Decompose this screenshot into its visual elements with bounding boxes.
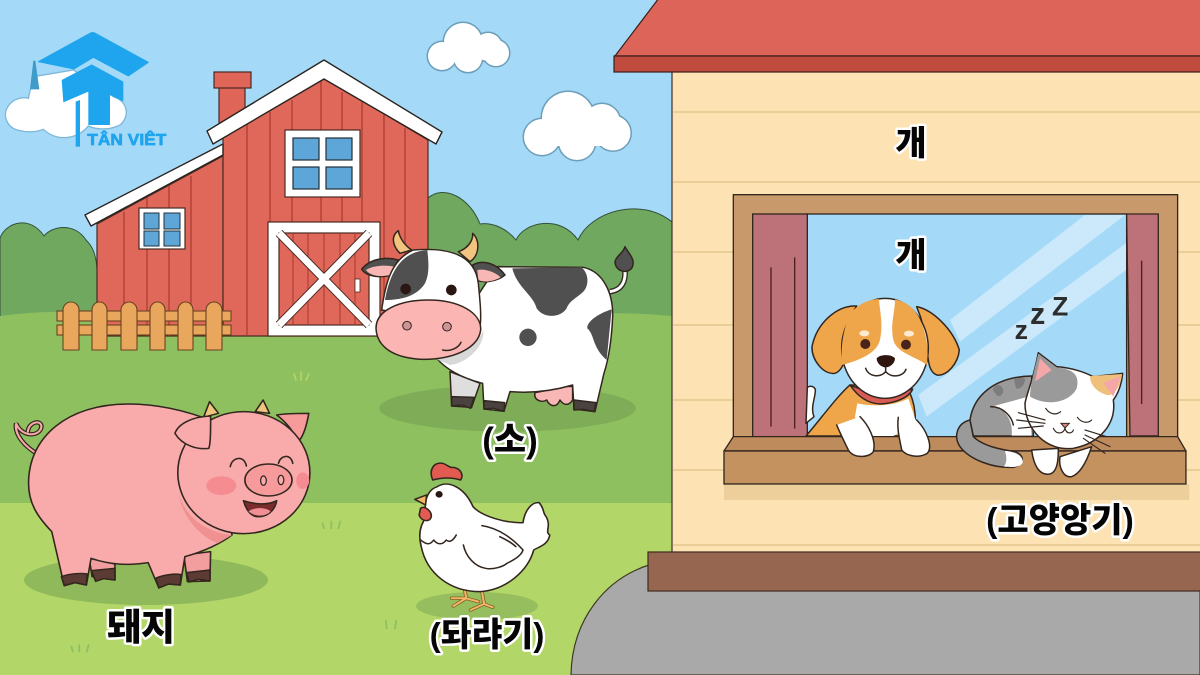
cat stripes: [993, 378, 1025, 396]
pig horns: [203, 400, 270, 417]
dog chest: [855, 398, 917, 436]
barn: plank lines: [124, 80, 405, 336]
dog face: [859, 330, 914, 376]
chimney: [214, 72, 251, 126]
cow shadow: [379, 385, 636, 432]
cat: [957, 353, 1123, 477]
chicken wattle: [419, 507, 431, 521]
dog body: [806, 385, 915, 436]
house roof: [615, 0, 1200, 56]
label: 고양앙기: (고양앙기): [986, 502, 1134, 540]
barn: left shed wall: [97, 156, 223, 336]
logo tassel: [30, 61, 39, 89]
pig head shade: [179, 493, 232, 543]
dog paws: [837, 417, 930, 456]
pig: [16, 400, 310, 588]
window: [724, 195, 1189, 500]
house siding lines: [673, 112, 1200, 545]
chicken: [415, 463, 550, 610]
barn: shed roof: [85, 144, 223, 226]
pig front hooves: [61, 573, 181, 588]
roof fascia: [614, 56, 1200, 72]
barn: main wall: [223, 78, 428, 336]
house: [614, 0, 1200, 591]
cow udder: [535, 386, 573, 406]
cow tail: [610, 247, 633, 292]
pig eyes: [230, 456, 293, 467]
pig head: [178, 412, 310, 534]
pig back legs: [89, 552, 211, 582]
logo cloud: [5, 70, 126, 138]
cow head patch: [385, 250, 428, 300]
sky background: [0, 0, 680, 340]
logo wordmark: TÂN VIÊT: [87, 130, 167, 149]
cow ears: [362, 258, 505, 282]
meadow: darker back field: [0, 312, 672, 510]
barn: door: [268, 222, 380, 336]
sleeping z letters: z: [1015, 315, 1028, 345]
label: 돼지: 돼지: [107, 607, 175, 648]
cat head: [1025, 353, 1123, 449]
pig cheeks: [206, 472, 309, 495]
chicken shadow: [416, 592, 538, 620]
logo letter T: [62, 64, 123, 147]
sleeping z letters: [1015, 292, 1068, 345]
pig body: [29, 404, 232, 588]
pavement: [571, 564, 1200, 675]
right curtain: [1127, 214, 1158, 436]
cat paws: [1032, 447, 1092, 477]
dog head patches: [842, 299, 928, 365]
cow hooves: [484, 400, 596, 412]
label: 개 in window: 개: [895, 237, 927, 275]
logo: Tân Việt: [5, 32, 167, 149]
pig tail: [16, 422, 41, 454]
meadow: lighter front field: [0, 503, 672, 675]
cat leg line: [991, 407, 1013, 425]
cow shadow under muzzle: [437, 330, 483, 365]
dog collar: [850, 385, 913, 404]
house wall: [672, 60, 1200, 555]
pig shadow: [24, 555, 268, 605]
barn: main roof: [207, 60, 442, 144]
pig snout: [245, 464, 292, 496]
cat ears inner: [1035, 358, 1121, 397]
cow face details: [400, 284, 461, 350]
window sill shadow: [724, 484, 1189, 500]
cloud: top centre: [428, 23, 509, 72]
fence: [57, 302, 231, 350]
left curtain: [753, 214, 807, 437]
chicken eye: [436, 491, 443, 498]
dog tail: [806, 386, 815, 423]
window glass: [807, 214, 1127, 437]
chicken feathers and wing: [421, 526, 523, 569]
barn: [85, 60, 442, 336]
chicken beak: [415, 495, 427, 505]
bushes behind barn: [0, 192, 672, 330]
label: 개 on wall: 개: [895, 125, 927, 163]
cow horns: [393, 231, 478, 262]
cow head: [382, 249, 481, 327]
grass tufts: [71, 372, 396, 652]
chicken body: [420, 484, 550, 592]
cow: [362, 231, 636, 432]
cat head patches: [1030, 354, 1077, 402]
pig mouth: [243, 501, 277, 517]
chicken comb: [431, 463, 462, 480]
chicken legs: [452, 590, 493, 610]
window sill: [724, 437, 1186, 484]
label: 소: (소): [482, 421, 538, 460]
barn: small window: [139, 208, 185, 249]
house foundation: [648, 552, 1200, 591]
cow back leg: [450, 372, 480, 407]
label: 돠랴기: (돠랴기): [430, 617, 544, 654]
glass reflections: [918, 215, 1126, 417]
sleeping z letters: Z: [1052, 292, 1068, 322]
cow spots: [512, 267, 612, 360]
dog head: [842, 298, 928, 398]
window frame: [733, 195, 1178, 438]
barn: upper window: [285, 130, 360, 197]
cow muzzle: [376, 300, 481, 359]
pig right ear: [277, 413, 309, 442]
cloud: right: [524, 92, 630, 160]
cat tail: [957, 420, 1022, 467]
dog ears: [812, 306, 959, 375]
pig left ear: [175, 416, 211, 449]
cat body: [970, 376, 1033, 436]
sleeping z letters: z: [1030, 297, 1045, 331]
logo cap: [38, 32, 148, 76]
cow body: [437, 267, 613, 412]
cat face: [1017, 408, 1110, 453]
